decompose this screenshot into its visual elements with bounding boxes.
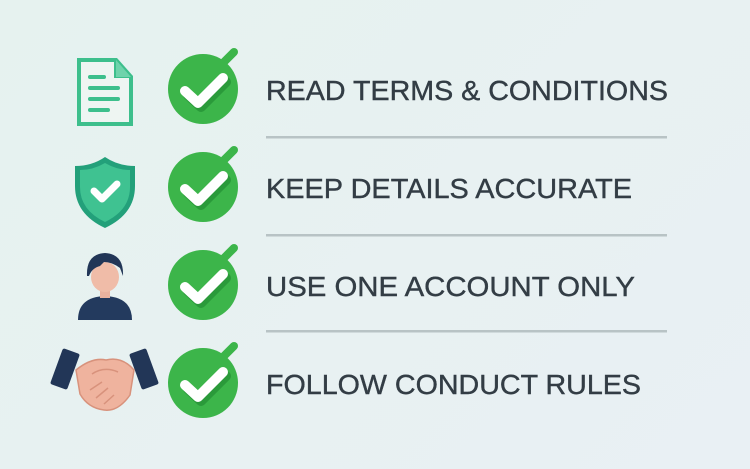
icon: handshake (50, 348, 159, 410)
check 2 (168, 150, 238, 222)
label 2: KEEP DETAILS ACCURATE (266, 173, 632, 204)
check 1 (168, 52, 238, 124)
check 4 (168, 346, 238, 418)
icon: document (77, 58, 133, 126)
label 1: READ TERMS & CONDITIONS (266, 75, 668, 106)
icon: person (78, 253, 132, 320)
check 3 (168, 248, 238, 320)
label 4: FOLLOW CONDUCT RULES (266, 369, 641, 400)
icon: shield (75, 157, 135, 228)
label 3: USE ONE ACCOUNT ONLY (266, 271, 635, 302)
